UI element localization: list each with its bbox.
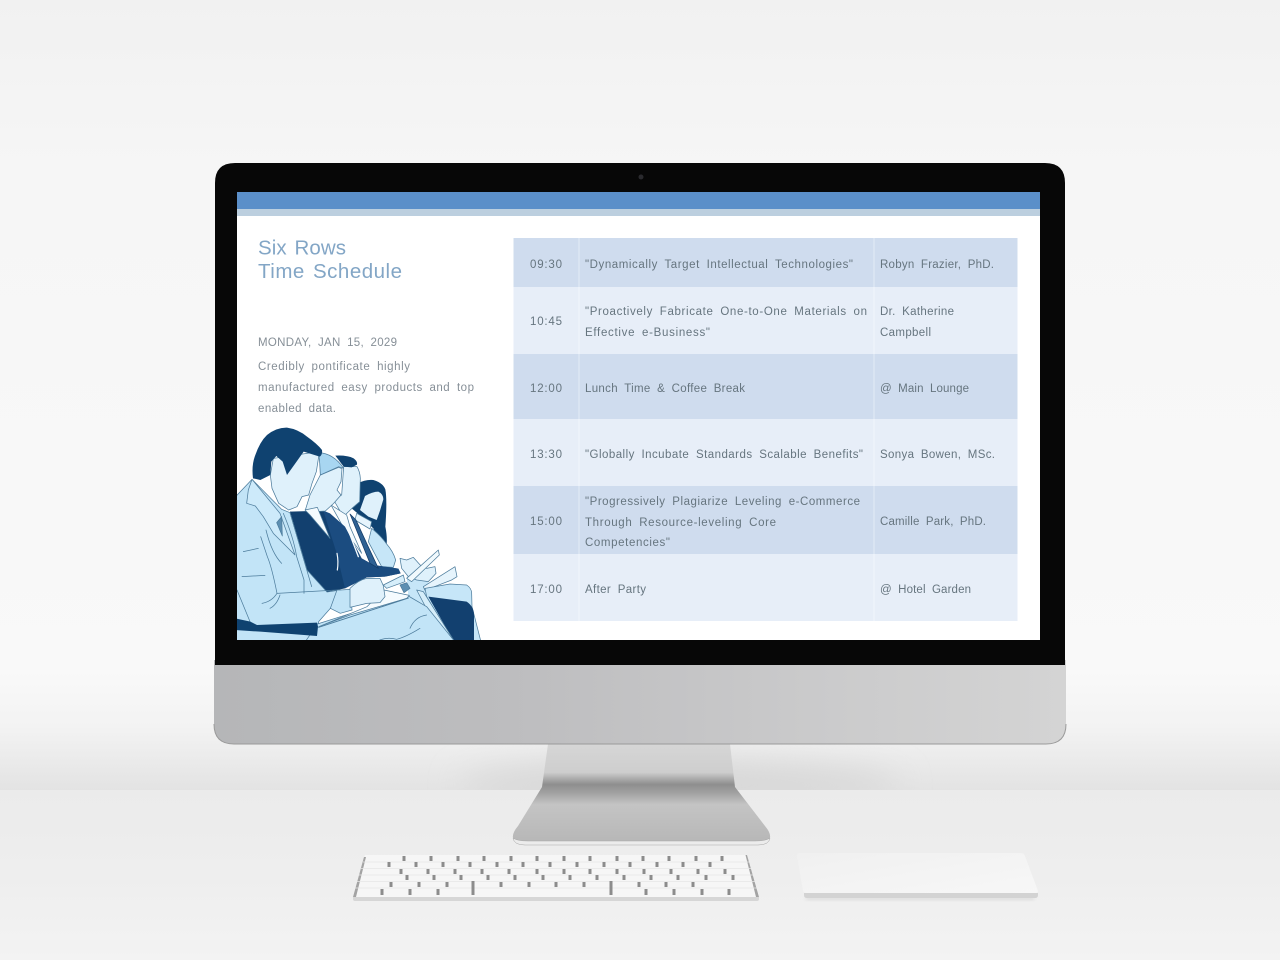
illustration: seated business people taking notes: [235, 428, 481, 641]
keyboard: [353, 855, 759, 901]
row 1: 09:30: [530, 259, 562, 271]
row 4: "Globally Incubate Standards Scalable Benefits": [585, 449, 863, 461]
row 2: [514, 287, 1018, 354]
row 2: Dr. Katherine: [880, 306, 954, 318]
front man: [235, 428, 454, 641]
row 4: Sonya Bowen, MSc.: [880, 449, 995, 461]
row 4: [514, 419, 1018, 486]
row 6: [514, 554, 1018, 621]
description: [258, 361, 474, 415]
row 1: [514, 238, 1018, 287]
row 5: 15:00: [530, 516, 562, 528]
monitor stand: [513, 744, 770, 845]
row 6: After Party: [585, 584, 646, 596]
third man: [290, 456, 401, 592]
head: [270, 452, 319, 510]
row 3: Lunch Time & Coffee Break: [585, 383, 745, 395]
monitor body: [214, 163, 1066, 744]
row 5: Competencies": [585, 537, 670, 549]
row 2: Effective e-Business": [585, 327, 710, 339]
row 5: Camille Park, PhD.: [880, 516, 986, 528]
row 6: 17:00: [530, 584, 562, 596]
row 5: [514, 486, 1018, 554]
row 3: [514, 354, 1018, 419]
lap: [306, 596, 454, 641]
camera: [638, 174, 644, 180]
row 1: Robyn Frazier, PhD.: [880, 259, 994, 271]
notepad: [319, 590, 409, 627]
description: Credibly pontificate highly: [258, 361, 410, 373]
monitor chin: [214, 660, 1066, 744]
title: Time Schedule: [258, 260, 402, 283]
second person: [290, 452, 344, 571]
hair: [253, 428, 322, 480]
row 3: 12:00: [530, 383, 562, 395]
header band: [237, 192, 1040, 216]
background: wall and desk: [0, 747, 1280, 790]
trackpad: [797, 853, 1038, 900]
row 2: 10:45: [530, 316, 562, 328]
title: [258, 236, 402, 283]
chair armrest: [235, 618, 318, 636]
jacket: [235, 479, 352, 641]
hand and pen: [350, 578, 385, 607]
description: enabled data.: [258, 403, 336, 415]
near woman's lap: [417, 584, 481, 641]
row 2: Campbell: [880, 327, 931, 339]
title: Six Rows: [258, 236, 346, 260]
monitor bezel: [215, 163, 1065, 665]
description: manufactured easy products and top: [258, 382, 474, 394]
far woman: [352, 480, 396, 567]
row 5: "Progressively Plagiarize Leveling e-Commerce: [585, 496, 860, 508]
date: MONDAY, JAN 15, 2029: [258, 337, 397, 349]
screen slide: [235, 192, 1040, 901]
row 4: 13:30: [530, 449, 562, 461]
row 6: @ Hotel Garden: [880, 584, 971, 596]
keyboard key gaps: [380, 856, 734, 895]
row 5: Through Resource-leveling Core: [585, 517, 776, 529]
row 2: "Proactively Fabricate One-to-One Materials on: [585, 306, 867, 318]
schedule table: [514, 238, 1018, 621]
tablet, clipboard and hands: [400, 550, 457, 607]
row 3: @ Main Lounge: [880, 383, 969, 395]
row 1: "Dynamically Target Intellectual Technologies": [585, 259, 853, 271]
